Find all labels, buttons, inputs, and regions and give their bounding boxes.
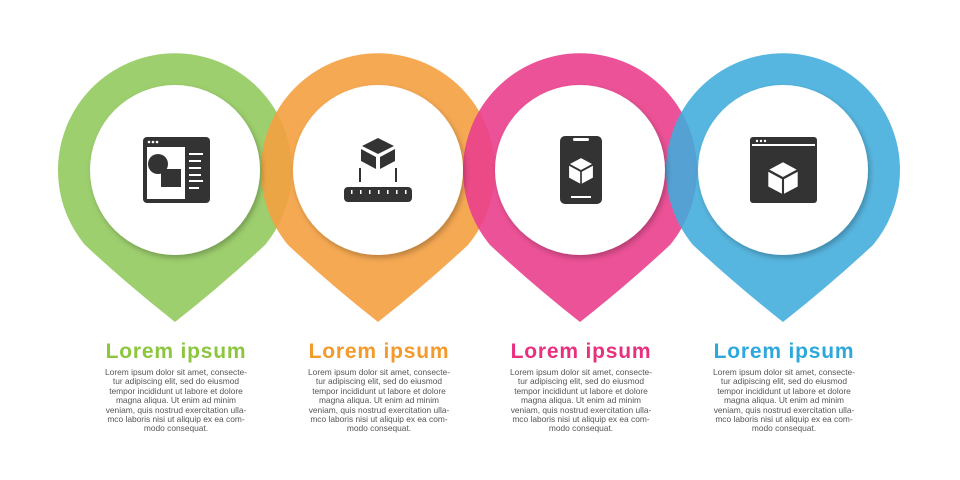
body 2: tempor incididunt ut labore et dolore: [312, 386, 446, 396]
body 1: [105, 367, 247, 433]
body 1: veniam, quis nostrud exercitation ulla-: [106, 405, 246, 415]
pin: pink: [463, 53, 697, 322]
body 4: tur adipiscing elit, sed do eiusmod: [721, 376, 847, 386]
heading 4: Lorem ipsum: [714, 340, 854, 363]
body 3: veniam, quis nostrud exercitation ulla-: [511, 405, 651, 415]
pin: blue: [666, 53, 900, 322]
body 3: [510, 367, 652, 433]
body 3: tempor incididunt ut labore et dolore: [514, 386, 648, 396]
pin: orange: [261, 53, 495, 322]
body 1: tur adipiscing elit, sed do eiusmod: [113, 376, 239, 386]
body 1: mco laboris nisi ut aliquip ex ea com-: [107, 414, 245, 424]
body 1: modo consequat.: [144, 423, 208, 433]
heading 3: Lorem ipsum: [511, 340, 651, 363]
icon: design window: [143, 137, 210, 203]
body 4: mco laboris nisi ut aliquip ex ea com-: [715, 414, 853, 424]
body 2: Lorem ipsum dolor sit amet, consecte-: [308, 367, 450, 377]
body 2: mco laboris nisi ut aliquip ex ea com-: [310, 414, 448, 424]
white circles: [90, 85, 868, 255]
heading 1: Lorem ipsum: [106, 340, 246, 363]
body 2: veniam, quis nostrud exercitation ulla-: [309, 405, 449, 415]
body 1: magna aliqua. Ut enim ad minim: [116, 395, 236, 405]
body 3: mco laboris nisi ut aliquip ex ea com-: [512, 414, 650, 424]
icon: cube on ruler: [344, 138, 412, 202]
body 3: modo consequat.: [549, 423, 613, 433]
body 4: tempor incididunt ut labore et dolore: [717, 386, 851, 396]
icon: window with cube: [750, 137, 817, 203]
body 3: Lorem ipsum dolor sit amet, consecte-: [510, 367, 652, 377]
body 2: [308, 367, 450, 433]
pin: green: [58, 53, 292, 322]
icon: phone with cube: [560, 136, 602, 204]
body 3: tur adipiscing elit, sed do eiusmod: [518, 376, 644, 386]
body 2: tur adipiscing elit, sed do eiusmod: [316, 376, 442, 386]
body 1: tempor incididunt ut labore et dolore: [109, 386, 243, 396]
body 4: magna aliqua. Ut enim ad minim: [724, 395, 844, 405]
body 3: magna aliqua. Ut enim ad minim: [521, 395, 641, 405]
body 4: [713, 367, 855, 433]
body 4: modo consequat.: [752, 423, 816, 433]
body 2: magna aliqua. Ut enim ad minim: [319, 395, 439, 405]
body 4: Lorem ipsum dolor sit amet, consecte-: [713, 367, 855, 377]
body 1: Lorem ipsum dolor sit amet, consecte-: [105, 367, 247, 377]
body 2: modo consequat.: [347, 423, 411, 433]
heading 2: Lorem ipsum: [309, 340, 449, 363]
body 4: veniam, quis nostrud exercitation ulla-: [714, 405, 854, 415]
